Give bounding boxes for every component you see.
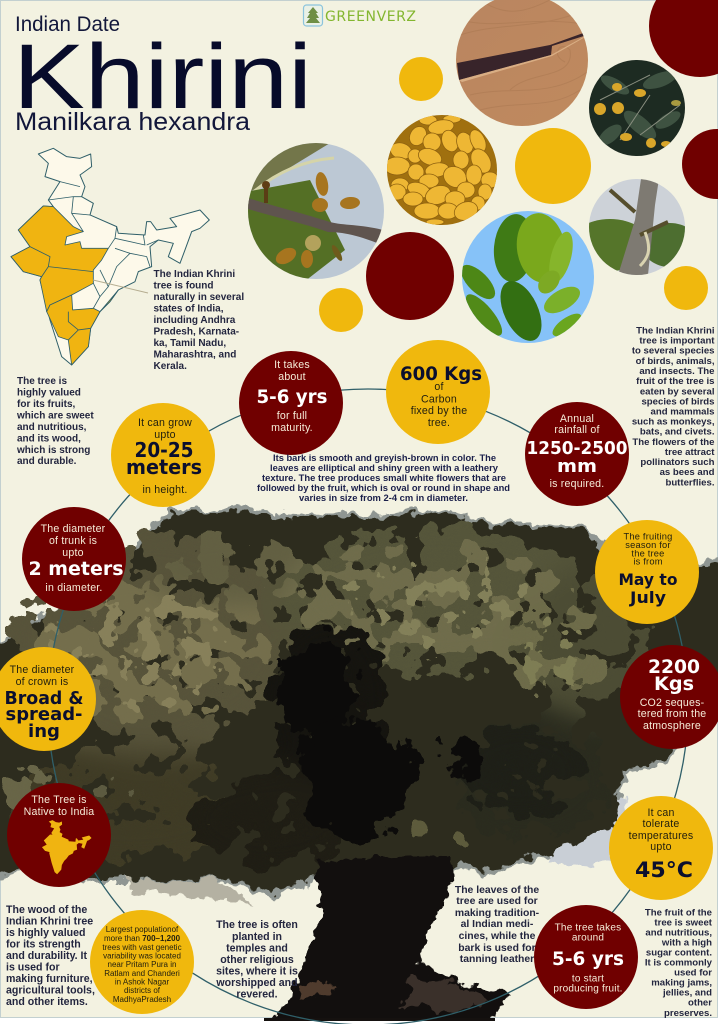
circle: start of fruiting: The tree takes	[555, 922, 621, 934]
circle: largest population: districts of	[124, 986, 161, 995]
text: wood uses: Indian Khrini tree	[6, 916, 93, 928]
text: bark, leaves, fruit description	[257, 453, 510, 503]
circle: temperature	[609, 796, 713, 900]
circle: largest population: trees with vast genetic	[102, 943, 182, 952]
text: medicines and tanning: tanning leather	[460, 954, 534, 965]
circle: carbon fixed: tree.	[428, 417, 450, 429]
circle: crown: spread-	[6, 704, 82, 725]
text: fruits and wood: which are sweet	[16, 410, 94, 422]
circle: CO2 sequestered: CO2 seques-	[640, 697, 705, 709]
text: importance to species: butterflies.	[665, 478, 714, 488]
trunk and roots	[262, 855, 512, 1024]
text: fruit uses: used for	[674, 968, 712, 978]
text: wood uses: is highly valued	[6, 927, 85, 939]
circle: height: upto	[154, 429, 176, 441]
text: natural range: Maharashtra, and	[154, 350, 236, 360]
circle: fruiting season: The fruiting	[624, 532, 672, 542]
text: temples: revered.	[236, 988, 278, 1000]
photo: green leaves	[462, 211, 594, 343]
canopy mass	[0, 510, 718, 895]
text: fruits and wood: for its fruits,	[17, 399, 76, 410]
state borders	[30, 182, 158, 340]
circle: largest population	[90, 910, 194, 1014]
photo: fruiting branches	[589, 60, 685, 156]
text: importance to species: species of birds	[641, 396, 714, 408]
text: importance to species: The flowers of the	[632, 437, 714, 448]
text: fruit uses: other	[688, 998, 712, 1008]
circle: rainfall: rainfall of	[554, 424, 600, 436]
text: importance to species: as bees and	[660, 467, 715, 478]
text: natural range: ka, Tamil Nadu,	[154, 338, 226, 349]
text: wood uses: and durability. It	[6, 950, 87, 962]
connecting ring line	[48, 389, 688, 1024]
decorative circle	[664, 266, 708, 310]
bright leaf patches	[30, 545, 600, 860]
circle: start of fruiting: to start	[572, 974, 604, 984]
icon: India map	[42, 820, 92, 874]
circle: height: 20-25	[134, 438, 194, 462]
circle: temperature: tolerate	[643, 818, 679, 830]
text: medicines and tanning: The leaves of the	[455, 885, 539, 896]
text: natural range: including Andhra	[154, 315, 236, 326]
decorative circle	[682, 129, 718, 199]
circle: crown: ing	[28, 721, 60, 742]
photo: wood grain	[456, 0, 588, 126]
circle: largest population: in Ashok Nagar	[115, 978, 169, 986]
text: fruit uses: with a high	[661, 938, 712, 948]
circle: fruiting season: is from	[633, 556, 663, 566]
circle: fruiting season: May to	[618, 570, 678, 589]
mid-tone foliage	[0, 515, 660, 870]
text: importance to species: of birds, animals,	[636, 356, 715, 367]
tree illustration	[0, 510, 718, 1024]
circle: CO2 sequestered: tered from the	[638, 708, 706, 720]
circle: CO2 sequestered	[620, 645, 718, 749]
text: temples: other religious	[220, 954, 294, 966]
circle: start of fruiting: producing fruit.	[553, 984, 623, 994]
circle: rainfall	[525, 402, 629, 506]
text: importance to species: fruit of the tree is	[636, 376, 714, 387]
text: fruits and wood: and durable.	[17, 456, 77, 467]
text: importance to species: The Indian Khrini	[636, 326, 714, 336]
text: importance to species: eaten by several	[640, 386, 714, 398]
circle: largest population: more than 700–1,200	[104, 934, 180, 943]
text: importance to species: tree attract	[665, 447, 715, 458]
text: temples: sites, where it is	[216, 966, 298, 978]
text: temples: planted in	[232, 931, 282, 943]
text: temples: The tree is often	[216, 919, 298, 931]
photo: branch with buds	[248, 143, 384, 279]
text: importance to species: such as monkeys,	[632, 416, 715, 428]
circle: height	[111, 403, 215, 507]
light patches on the trunk crown	[317, 824, 417, 886]
circle: maturity: It takes	[274, 359, 310, 371]
circle: temperature: 45°C	[635, 858, 693, 882]
text: fruits and wood: highly valued	[17, 388, 81, 398]
logo: Greenverz: GREENVERZ	[325, 9, 416, 25]
olive foliage patches	[0, 525, 620, 865]
text: natural range: naturally in several	[154, 292, 244, 303]
circle: carbon fixed: of	[434, 381, 444, 393]
text: importance to species: pollinators such	[640, 457, 715, 468]
text: wood uses: agricultural tools,	[6, 984, 95, 996]
circle: crown: of crown is	[16, 676, 68, 688]
circle: rainfall: is required.	[550, 478, 604, 490]
text: fruit uses: preserves.	[664, 1008, 712, 1019]
circle: native to India: Native to India	[24, 806, 94, 818]
text: fruit uses: making jams,	[651, 978, 712, 988]
circle: height: meters	[126, 455, 202, 479]
circle: trunk diameter: of trunk is	[49, 535, 97, 547]
text: importance to species: and mammals	[650, 406, 714, 418]
text: temples: worshipped and	[215, 977, 298, 989]
canopy sky-tinted fringe	[0, 510, 718, 902]
decorative circle	[366, 232, 454, 320]
logo: Greenverz	[304, 5, 416, 26]
circle: crown: The diameter	[10, 664, 75, 676]
circle: maturity: for full	[277, 410, 307, 422]
map of India with highlighted states	[11, 148, 209, 365]
map outline	[11, 148, 209, 365]
heading: Indian Date: Indian Date	[15, 13, 120, 36]
photo: yellow fruits	[384, 113, 500, 228]
text: fruits and wood: The tree is	[17, 376, 67, 387]
title: Khirini: Khirini	[13, 26, 312, 128]
circle: fruiting season: July	[629, 588, 667, 607]
text: wood uses: is used for	[6, 962, 60, 974]
circle: trunk diameter: upto	[62, 547, 84, 559]
text: medicines and tanning: al Indian medi-	[461, 919, 534, 930]
text: bark, leaves, fruit description: varies in size from 2-4 cm in diameter.	[299, 493, 468, 503]
circle: native to India: The Tree is	[31, 794, 87, 806]
circle: crown: Broad &	[4, 688, 84, 709]
circle: carbon fixed: fixed by the	[411, 405, 467, 417]
circle: fruiting season	[595, 520, 699, 624]
circle: native to India	[7, 783, 111, 887]
text: wood uses: making furniture,	[6, 973, 93, 985]
text: fruit uses: The fruit of the	[645, 908, 712, 918]
text: fruit uses: tree is sweet	[654, 918, 713, 928]
circle: carbon fixed	[386, 340, 490, 444]
text: fruit uses: It is commonly	[645, 958, 713, 968]
highlighted western states	[11, 206, 108, 312]
text: natural range: The Indian Khrini	[154, 269, 235, 280]
circle: largest population: Largest populationof	[106, 925, 179, 934]
highlighted southern states	[47, 290, 118, 365]
circle: height: It can grow	[138, 417, 192, 429]
circle: rainfall: 1250-2500	[526, 438, 628, 459]
circle: height: in height.	[142, 484, 188, 496]
text: fruit uses: jellies, and	[662, 988, 712, 998]
subtitle: Manilkara hexandra: Manilkara hexandra	[15, 108, 250, 136]
text: importance to species: to several species	[632, 346, 714, 356]
circle: crown	[0, 647, 96, 751]
text: bark, leaves, fruit description: texture. The tree produces small white flowers that are	[262, 473, 506, 483]
circle: maturity	[239, 351, 343, 455]
text: natural range: Pradesh, Karnata-	[154, 326, 239, 338]
text: wood uses: and other items.	[6, 996, 88, 1008]
circle: trunk diameter	[22, 507, 126, 611]
circle: CO2 sequestered: 2200	[648, 656, 700, 678]
dark shadow centre	[280, 635, 481, 840]
decorative circle	[399, 57, 443, 101]
circle: trunk diameter: in diameter.	[45, 582, 103, 594]
circle: fruiting season: season for	[625, 540, 671, 550]
mottled shadow around centre	[180, 610, 595, 875]
circle: trunk diameter: 2 meters	[28, 558, 124, 580]
circle: rainfall: mm	[557, 456, 597, 477]
decorative circle	[515, 128, 591, 204]
circle: maturity: 5-6 yrs	[256, 386, 328, 408]
text: importance to species: tree is important	[639, 336, 715, 346]
circle: largest population: Ratlam and Chanderi	[104, 969, 180, 978]
text: natural range: states of India,	[154, 304, 224, 314]
circle: CO2 sequestered: atmosphere	[643, 720, 701, 732]
text: wood uses: for its strength	[6, 938, 81, 950]
text: bark, leaves, fruit description: Its bark is smooth and greyish-brown in color. The	[273, 453, 496, 463]
text: bark, leaves, fruit description: followed by the fruit, which is oval or round in shape and	[257, 483, 510, 493]
text: medicines and tanning: bark is used for	[458, 943, 536, 954]
circle: carbon fixed: 600 Kgs	[400, 363, 482, 385]
circle: rainfall: Annual	[560, 413, 594, 425]
circle: fruiting season: the tree	[631, 548, 665, 558]
circle: temperature: temperatures	[629, 830, 693, 842]
text: natural range: tree is found	[154, 280, 214, 292]
photo: twig	[589, 179, 685, 275]
text: medicines and tanning: tree are used for	[456, 896, 538, 907]
circle: start of fruiting: around	[572, 932, 604, 944]
text: medicines and tanning: making tradition-	[455, 908, 540, 919]
text: importance to species: and insects. The	[639, 366, 714, 377]
ground shadow of roots	[264, 1018, 495, 1021]
circle: start of fruiting: 5-6 yrs	[552, 948, 624, 970]
circle: largest population: MadhyaPradesh	[113, 995, 171, 1004]
text: bark, leaves, fruit description: leaves are elliptical and shiny green with a leathery	[270, 463, 499, 473]
bottom white strip	[0, 1018, 718, 1024]
circle: trunk diameter: The diameter	[41, 523, 106, 535]
circle: maturity: maturity.	[271, 422, 313, 434]
text: temples: temples and	[226, 942, 288, 954]
leader line	[93, 280, 148, 293]
text: fruit uses: sugar content.	[646, 948, 712, 958]
circle: CO2 sequestered: Kgs	[654, 673, 694, 695]
text: fruits and wood: which is strong	[16, 445, 90, 456]
circle: largest population: variability was located	[103, 952, 181, 960]
circle: temperature: It can	[647, 807, 675, 819]
circle: start of fruiting	[534, 905, 638, 1009]
text: wood uses: The wood of the	[6, 904, 87, 916]
text: importance to species: bats, and civets.	[640, 426, 714, 438]
circle: largest population: near Pritam Pura in	[108, 960, 176, 969]
text: medicines and tanning: cines, while the	[459, 931, 536, 942]
circle: maturity: about	[278, 371, 306, 383]
text: fruits and wood: and nutritious,	[17, 422, 87, 433]
text: fruits and wood: and its wood,	[17, 434, 81, 444]
decorative circle	[319, 288, 363, 332]
circle: temperature: upto	[650, 841, 672, 853]
circle: carbon fixed: Carbon	[421, 394, 457, 406]
text: fruit uses: and nutritious,	[645, 928, 712, 938]
decorative circle	[649, 0, 718, 77]
text: natural range: Kerala.	[154, 361, 187, 372]
